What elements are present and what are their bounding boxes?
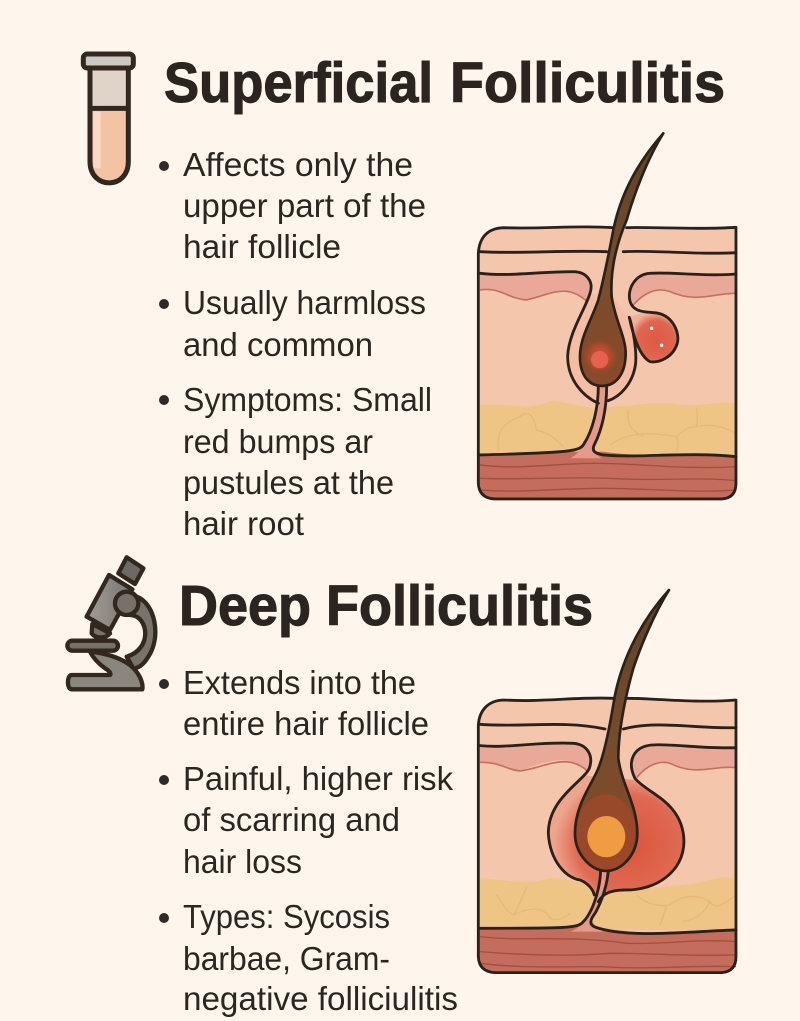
bullet list: superficial: and common: [183, 327, 373, 364]
title: deep folliculitis: Deep Folliculitis: [179, 574, 593, 638]
title: superficial folliculitis: Superficial: [164, 51, 433, 115]
bullet list: superficial: [159, 147, 432, 543]
bullet list: superficial: Affects only the: [183, 147, 413, 184]
bullet list: deep: [159, 665, 458, 1018]
title: superficial folliculitis: Folliculitis: [450, 51, 725, 115]
bullet list: deep: barbae, Gram-: [183, 941, 390, 978]
title: superficial folliculitis: [164, 51, 725, 115]
bullet list: superficial: red bumps ar: [183, 424, 373, 461]
bullet list: superficial: Usually harmloss: [183, 285, 426, 322]
bullet list: superficial: hair follicle: [183, 229, 341, 266]
bullet list: deep: Extends into the: [183, 665, 416, 702]
bullet list: deep: Types: Sycosis: [183, 899, 390, 936]
bullet list: deep: entire hair follicle: [183, 706, 429, 743]
icon: test tube: [83, 54, 133, 183]
bullet list: deep: hair loss: [183, 844, 302, 881]
bullet list: superficial: Symptoms: Small: [183, 382, 432, 419]
bullet list: superficial: upper part of the: [183, 188, 426, 225]
bullet list: deep: negative folliciulitis: [183, 981, 458, 1018]
bullet list: deep: Painful, higher risk: [183, 761, 453, 798]
bullet list: deep: of scarring and: [183, 802, 400, 839]
bullet list: superficial: hair root: [183, 506, 305, 543]
bullet list: superficial: pustules at the: [183, 465, 394, 502]
icon: microscope: [67, 557, 155, 689]
diagram: deep folliculitis skin cross-section: [478, 590, 736, 973]
diagram: superficial folliculitis skin cross-section: [478, 133, 736, 499]
